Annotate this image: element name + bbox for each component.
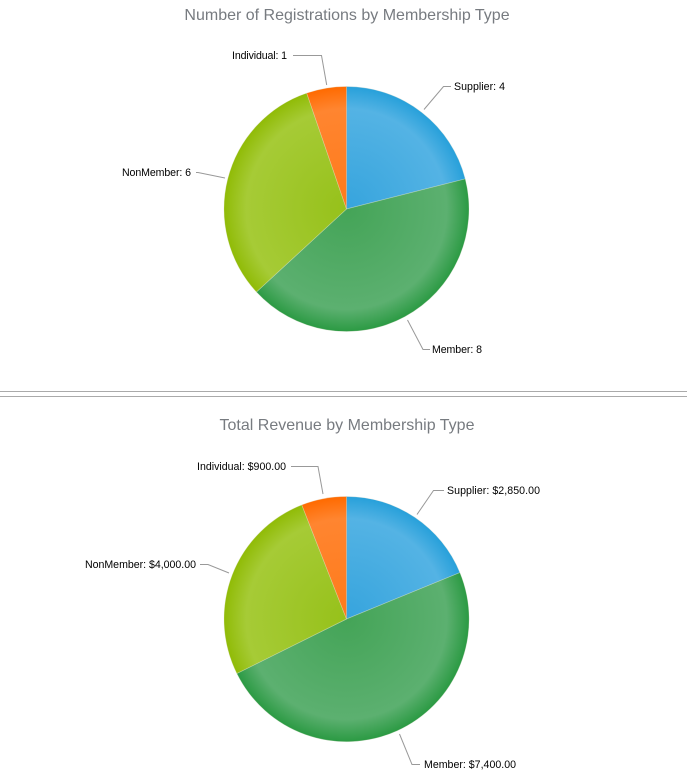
label: Member 8: Member: 8 bbox=[432, 344, 482, 356]
slice: Individual bbox=[302, 496, 346, 619]
label: Individual $900.00 bbox=[197, 461, 323, 494]
title: registrations: Number of Registrations by Membership Type bbox=[184, 7, 510, 24]
pie chart: registrations bbox=[224, 86, 469, 332]
label: NonMember $4,000.00 bbox=[85, 559, 229, 573]
label: Member 8 bbox=[408, 320, 482, 356]
slice: NonMember bbox=[224, 505, 346, 674]
label: Individual $900.00: Individual: $900.00 bbox=[197, 461, 286, 473]
slice: Supplier bbox=[346, 86, 465, 209]
divider bbox=[0, 392, 687, 396]
slice: NonMember bbox=[224, 93, 346, 292]
label: Supplier 4 bbox=[424, 81, 505, 110]
label: Supplier $2,850.00 bbox=[417, 485, 540, 514]
pie chart: revenue bbox=[224, 496, 469, 742]
label: NonMember 6: NonMember: 6 bbox=[122, 167, 191, 179]
title: revenue: Total Revenue by Membership Type bbox=[220, 417, 475, 434]
label: Member $7,400.00: Member: $7,400.00 bbox=[424, 759, 516, 771]
slice: Supplier bbox=[346, 496, 460, 619]
slice: Member bbox=[237, 573, 469, 742]
label: Supplier 4: Supplier: 4 bbox=[454, 81, 505, 93]
slice: Individual bbox=[307, 86, 346, 209]
label: NonMember 6 bbox=[122, 167, 225, 179]
label: NonMember $4,000.00: NonMember: $4,000.00 bbox=[85, 559, 196, 571]
label: Individual 1: Individual: 1 bbox=[232, 50, 287, 62]
slice: Member bbox=[256, 179, 469, 332]
label: Individual 1 bbox=[232, 50, 327, 85]
label: Member $7,400.00 bbox=[400, 734, 516, 771]
label: Supplier $2,850.00: Supplier: $2,850.00 bbox=[447, 485, 540, 497]
